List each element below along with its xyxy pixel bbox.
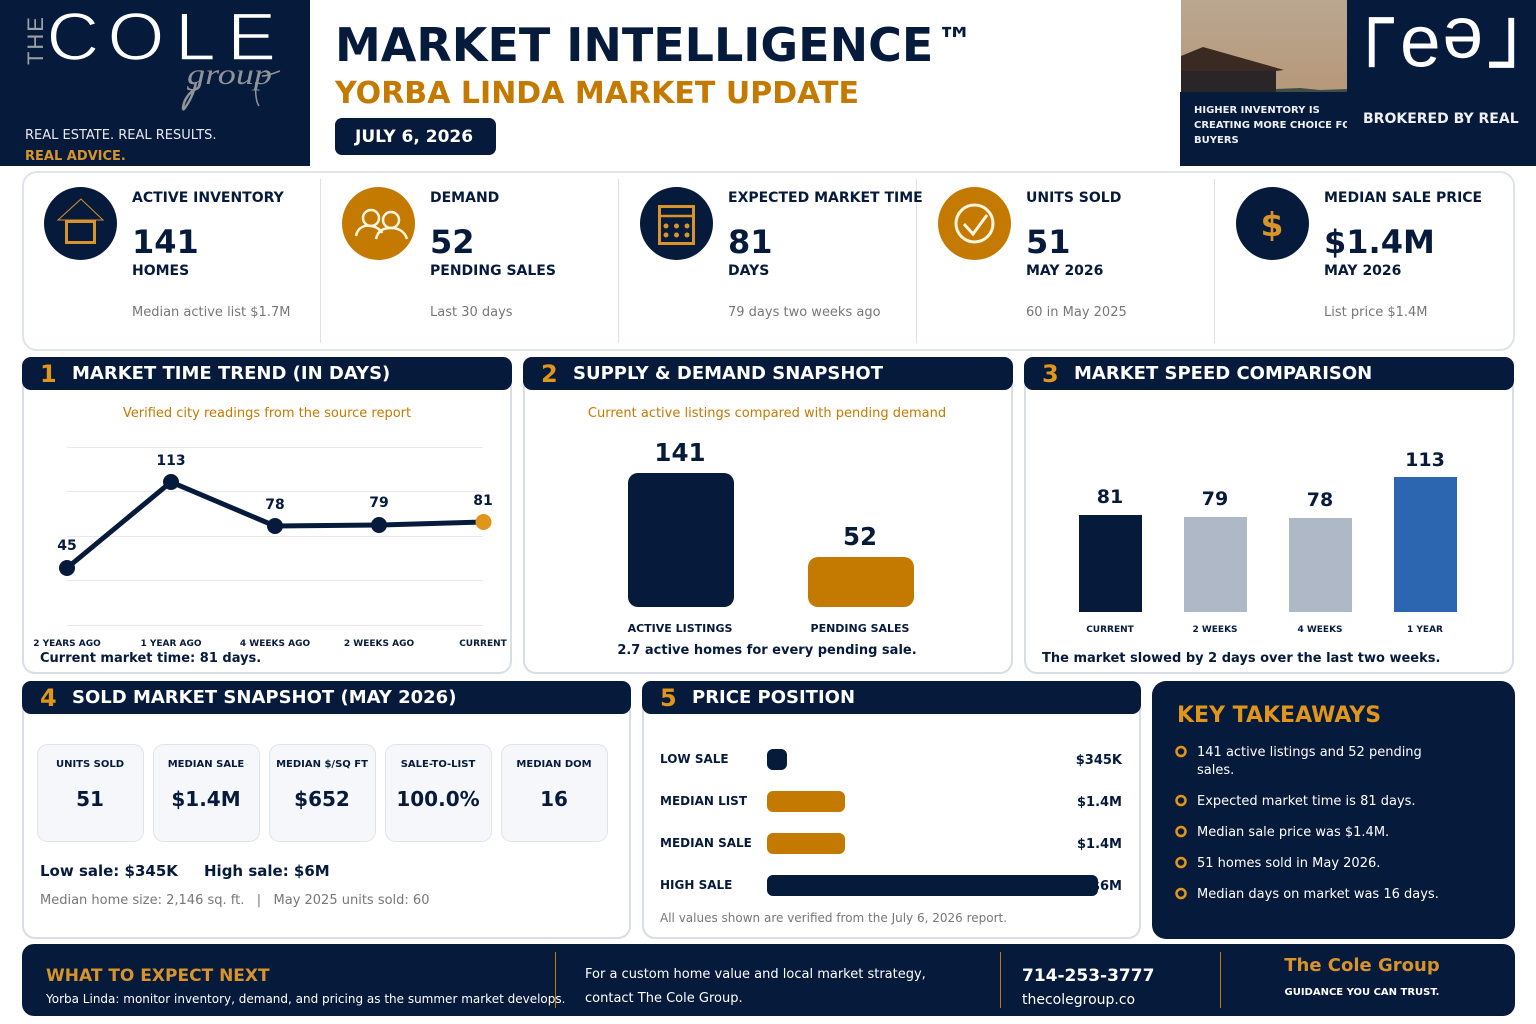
logo word: group (183, 58, 280, 109)
line chart: 79 (369, 495, 389, 511)
chart note: Verified city readings from the source report (123, 406, 411, 421)
KPI: demand: PENDING SALES (430, 263, 556, 279)
KPI: active inventory: ACTIVE INVENTORY (132, 190, 285, 206)
icon: house (44, 187, 117, 260)
chart takeaway: Current market time: 81 days. (40, 651, 261, 666)
panel: KPI strip (23, 172, 1514, 350)
heading 5: 5 (660, 684, 677, 712)
KPI: expected market time: 79 days two weeks ago (728, 305, 881, 320)
bar chart: 2 WEEKS (1192, 625, 1238, 635)
takeaway 2: Expected market time is 81 days. (1197, 794, 1416, 809)
stat card: median sale (154, 744, 260, 842)
bar chart: CURRENT (1086, 625, 1135, 635)
horizontal bar chart: MEDIAN SALE (660, 836, 752, 850)
KPI: median sale price: $1.4M (1324, 223, 1435, 261)
bar chart: 79 (1202, 488, 1228, 510)
stat card: median sale: $1.4M (171, 787, 241, 811)
bar chart: 78 (1307, 489, 1333, 511)
KPI: units sold: MAY 2026 (1026, 263, 1103, 279)
panel 3: market speed (1024, 357, 1514, 673)
KPI: median sale price (1236, 187, 1482, 320)
photo caption panel: HIGHER INVENTORY IS (1194, 105, 1320, 116)
KPI: demand: DEMAND (430, 190, 499, 206)
bar chart: 141 (654, 438, 706, 467)
tagline accent: REAL ADVICE. (25, 149, 126, 164)
icon: people (342, 187, 415, 260)
photo caption panel (1180, 92, 1359, 166)
stat card: median price per square foot (270, 744, 376, 842)
line chart: 2 WEEKS AGO (344, 639, 414, 649)
bar chart: ACTIVE LISTINGS (628, 622, 732, 635)
heading 1: MARKET TIME TREND (IN DAYS) (72, 363, 390, 384)
logo word: THE: THE (23, 17, 48, 65)
heading 4 (22, 681, 631, 714)
line chart: 78 (265, 497, 285, 513)
KPI: active inventory (44, 187, 290, 320)
KPI: expected market time (640, 187, 923, 320)
subtitle: YORBA LINDA MARKET UPDATE (334, 76, 859, 111)
heading 4: SOLD MARKET SNAPSHOT (MAY 2026) (72, 687, 456, 708)
KPI: demand: 52 (430, 223, 475, 261)
takeaway 3: Median sale price was $1.4M. (1197, 825, 1389, 840)
horizontal bar chart: LOW SALE (660, 752, 729, 766)
stat card: sale to list (386, 744, 492, 842)
call to action (585, 967, 926, 1006)
logo word: group: group (187, 58, 272, 91)
verification note: All values shown are verified from the July 6, 2026 report. (660, 911, 1007, 925)
footer band (22, 944, 1515, 1016)
brokerage panel (1347, 0, 1536, 166)
panel 4: sold market snapshot (22, 681, 631, 938)
heading 3 (1024, 357, 1514, 390)
takeaway 1 (1176, 745, 1422, 778)
KPI: active inventory: Median active list $1.7M (132, 305, 290, 320)
KPI: demand (342, 187, 556, 320)
line chart: 1 YEAR AGO (140, 639, 202, 649)
bar chart: 1 YEAR (1407, 625, 1443, 635)
stat card: median DOM (502, 744, 608, 842)
header: logo panel (0, 0, 310, 166)
icon: calendar (640, 187, 713, 260)
contact details: 714-253-3777 (1022, 966, 1154, 986)
heading 2 (523, 357, 1013, 390)
takeaways heading: KEY TAKEAWAYS (1177, 703, 1381, 728)
panel 1: market time trend (22, 357, 512, 673)
heading 5: PRICE POSITION (692, 687, 855, 708)
what to expect next (45, 966, 565, 1006)
horizontal bar chart: HIGH SALE (660, 878, 732, 892)
panel 2: supply and demand (523, 357, 1013, 673)
bar chart (1079, 449, 1457, 635)
real logo: Γ (1365, 3, 1395, 83)
KPI: units sold (938, 187, 1127, 320)
icon: dollar: $ (1261, 205, 1283, 244)
brokered by: BROKERED BY REAL (1363, 111, 1519, 127)
horizontal bar chart (660, 749, 1123, 896)
heading 3: 3 (1042, 360, 1059, 388)
KPI: expected market time: 81 (728, 223, 773, 261)
icon: check circle (938, 187, 1011, 260)
heading 4: 4 (40, 684, 57, 712)
bar chart: 52 (843, 522, 877, 551)
panel 5: price position (642, 681, 1141, 938)
bar chart: 4 WEEKS (1297, 625, 1343, 635)
KPI: demand: Last 30 days (430, 305, 513, 320)
stat card: median DOM: MEDIAN DOM (516, 759, 592, 770)
KPI: active inventory: 141 (132, 223, 199, 261)
chart note: Current active listings compared with pending demand (588, 406, 946, 421)
horizontal bar chart: $6M (1091, 879, 1122, 894)
line chart: CURRENT (459, 639, 508, 649)
heading 2: 2 (541, 360, 558, 388)
stat card: units sold (38, 744, 144, 842)
KPI: median sale price: MEDIAN SALE PRICE (1324, 190, 1482, 206)
horizontal bar chart: $1.4M (1077, 795, 1122, 810)
trademark: ™ (937, 21, 973, 62)
logo word: COLE: COLE (46, 0, 276, 74)
contact details: thecolegroup.co (1022, 992, 1135, 1008)
call to action: For a custom home value and local market strategy, (585, 967, 926, 982)
real logo: e (1442, 2, 1483, 84)
brand sign-off (1284, 955, 1440, 998)
what to expect next: WHAT TO EXPECT NEXT (46, 966, 270, 986)
real logo: Γ (1488, 2, 1518, 82)
icon: dollar (1236, 187, 1309, 260)
stat card: sale to list: 100.0% (396, 787, 480, 811)
main title: MARKET INTELLIGENCE (335, 18, 933, 72)
brand sign-off: The Cole Group (1284, 955, 1440, 976)
what to expect next: Yorba Linda: monitor inventory, demand, and pricing as the summer market develops. (45, 992, 565, 1006)
bar chart (628, 438, 914, 635)
real logo (1365, 2, 1518, 84)
contact details (1022, 966, 1154, 1008)
KPI: median sale price: List price $1.4M (1324, 305, 1428, 320)
line chart: 4 WEEKS AGO (240, 639, 310, 649)
stat card: units sold: 51 (76, 787, 104, 811)
heading 3: MARKET SPEED COMPARISON (1074, 363, 1372, 384)
date badge (335, 118, 496, 155)
stat card: units sold: UNITS SOLD (56, 759, 124, 770)
photo: house at dusk (1181, 0, 1347, 92)
photo caption panel: BUYERS (1194, 135, 1239, 146)
heading 2: SUPPLY & DEMAND SNAPSHOT (573, 363, 884, 384)
bar chart: PENDING SALES (811, 622, 910, 635)
KPI: units sold: UNITS SOLD (1026, 190, 1121, 206)
stat card: median sale: MEDIAN SALE (168, 759, 244, 770)
bar chart: 81 (1097, 486, 1123, 508)
stat card: sale to list: SALE-TO-LIST (401, 759, 475, 770)
stat card: median price per square foot: MEDIAN $/SQ FT (276, 759, 368, 770)
bar chart: 113 (1405, 449, 1445, 471)
takeaway 4: 51 homes sold in May 2026. (1197, 856, 1380, 871)
date badge: JULY 6, 2026 (354, 127, 473, 147)
KPI: expected market time: EXPECTED MARKET TIME (728, 190, 923, 206)
KPI: median sale price: MAY 2026 (1324, 263, 1401, 279)
supporting note: Median home size: 2,146 sq. ft. | May 2025 units sold: 60 (40, 893, 429, 908)
horizontal bar chart: $1.4M (1077, 837, 1122, 852)
stat card: median price per square foot: $652 (294, 787, 350, 811)
horizontal bar chart: $345K (1076, 753, 1123, 768)
takeaway 1: 141 active listings and 52 pending (1197, 745, 1422, 760)
line chart: 2 YEARS AGO (33, 639, 101, 649)
low and high sale: Low sale: $345K (40, 862, 179, 880)
panel: key takeaways (1152, 681, 1515, 939)
high sale: High sale: $6M (204, 862, 330, 880)
photo caption panel: CREATING MORE CHOICE FOR (1194, 120, 1359, 131)
takeaway 5: Median days on market was 16 days. (1197, 887, 1439, 902)
KPI: units sold: 51 (1026, 223, 1071, 261)
tagline: REAL ESTATE. REAL RESULTS. (25, 128, 217, 143)
brand sign-off: GUIDANCE YOU CAN TRUST. (1285, 987, 1439, 998)
chart takeaway: 2.7 active homes for every pending sale. (617, 643, 917, 658)
line chart (33, 448, 508, 649)
heading 1 (22, 357, 512, 390)
KPI: expected market time: DAYS (728, 263, 769, 279)
call to action: contact The Cole Group. (585, 991, 743, 1006)
heading 1: 1 (40, 360, 57, 388)
chart takeaway: The market slowed by 2 days over the last two weeks. (1042, 651, 1440, 666)
line chart: 45 (57, 538, 77, 554)
KPI: active inventory: HOMES (132, 263, 189, 279)
takeaway 1: sales. (1197, 763, 1234, 778)
horizontal bar chart: MEDIAN LIST (660, 794, 748, 808)
heading 5 (642, 681, 1141, 714)
line chart: 113 (156, 453, 186, 469)
KPI: units sold: 60 in May 2025 (1026, 305, 1127, 320)
real logo: e (1400, 2, 1441, 82)
line chart: 81 (473, 493, 493, 509)
stat card: median DOM: 16 (540, 787, 568, 811)
